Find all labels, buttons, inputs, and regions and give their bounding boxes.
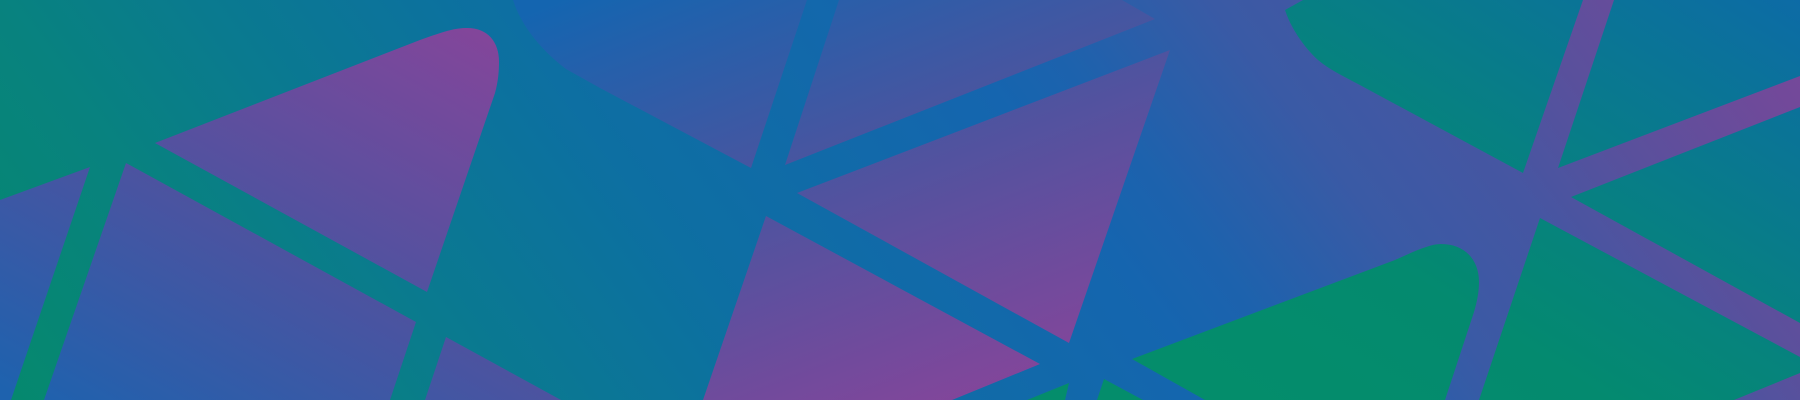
centre shape group — [513, 0, 1170, 400]
right shape group — [1027, 0, 1800, 400]
right triangle — [1571, 107, 1800, 323]
rounded purple triangle — [155, 28, 499, 292]
left edge sliver — [0, 167, 90, 400]
rounded green triangle — [1132, 244, 1479, 400]
top teal rounded shape — [1285, 0, 1583, 173]
small green sliver right — [1097, 379, 1143, 400]
top blue rounded shape — [513, 0, 807, 168]
large centre triangle — [797, 50, 1170, 343]
top right shape — [1558, 0, 1800, 168]
lower centre shape — [703, 216, 1040, 400]
top centre shape — [785, 0, 1155, 165]
left shape group — [0, 28, 561, 400]
small lower triangle — [425, 337, 561, 400]
lower left quadrilateral — [44, 163, 416, 400]
small green sliver left — [1027, 383, 1069, 400]
lower right shape — [1479, 218, 1800, 400]
